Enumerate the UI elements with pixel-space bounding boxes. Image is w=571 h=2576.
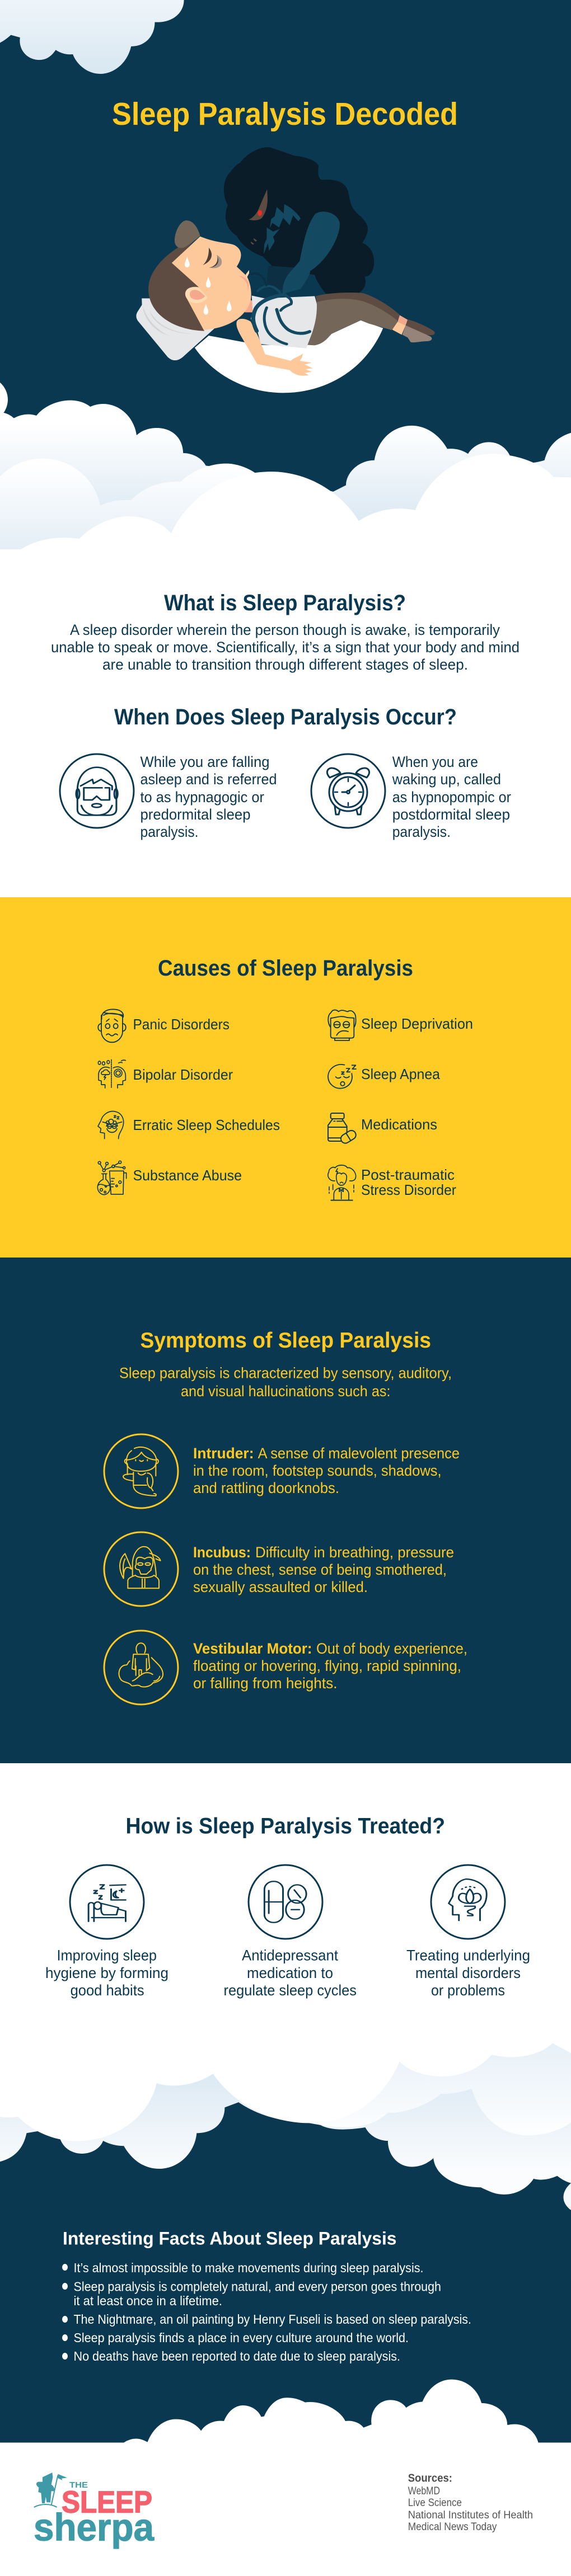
demon teeth	[264, 204, 301, 254]
icon: erratic sleep schedules	[98, 1112, 124, 1139]
clouds: hero bottom front layer	[18, 454, 571, 571]
clouds: footer	[124, 2380, 539, 2442]
list: interesting facts: Sleep paralysis is completely natural, and every person goes through	[74, 2279, 441, 2294]
text block: waking up: waking up, called	[392, 771, 501, 788]
text block: incubus: on the chest, sense of being smothered,	[193, 1561, 447, 1578]
text block: intruder: and rattling doorknobs.	[193, 1480, 339, 1496]
demon silhouette	[224, 147, 374, 294]
clouds: hero bottom middle layer	[0, 459, 350, 571]
text block: definition	[51, 621, 519, 673]
panel: treatment background	[0, 1763, 571, 2015]
text block: improving sleep hygiene: hygiene by forming	[45, 1965, 169, 1981]
text block: incubus: sexually assaulted or killed.	[193, 1579, 368, 1595]
text: post-traumatic stress disorder: Stress Disorder	[361, 1181, 456, 1198]
title: Sleep Paralysis Decoded	[112, 96, 458, 132]
text: bipolar disorder: Bipolar Disorder	[133, 1066, 233, 1083]
text block: intruder: A sense of malevolent presence	[258, 1445, 460, 1462]
logo word: the: THE	[69, 2480, 88, 2490]
icon: sleep deprivation	[328, 1010, 356, 1040]
text block: vestibular motor: floating or hovering, flying, rapid spinning,	[193, 1657, 461, 1674]
text block: definition: A sleep disorder wherein the person though is awake, is temporarily	[70, 621, 500, 638]
hair	[148, 237, 204, 331]
arm	[236, 319, 313, 376]
illustration: sleeper and shadow demon on moon	[136, 147, 435, 393]
demon nostrils	[251, 238, 257, 244]
near ankle	[392, 322, 406, 335]
text block: falling asleep: asleep and is referred	[140, 771, 277, 788]
heading: when does sleep paralysis occur: When Does Sleep Paralysis Occur?	[114, 705, 457, 729]
heading: symptoms of sleep paralysis: Symptoms of Sleep Paralysis	[140, 1329, 431, 1353]
text block: improving sleep hygiene	[45, 1947, 169, 1999]
demon pupil	[258, 210, 262, 216]
text: sleep apnea: Sleep Apnea	[361, 1066, 441, 1082]
text block: vestibular motor: Vestibular Motor:	[193, 1640, 312, 1657]
icon: intruder ghost in circle	[104, 1434, 178, 1508]
eyebrow	[203, 248, 212, 265]
text: panic disorders: Panic Disorders	[133, 1016, 230, 1033]
text: post-traumatic stress disorder	[361, 1166, 456, 1198]
list: interesting facts: it at least once in a lifetime.	[74, 2294, 222, 2308]
text block: waking up: postdormital sleep	[392, 806, 510, 823]
heading: causes of sleep paralysis: Causes of Sleep Paralysis	[158, 956, 413, 981]
icon: sleep mask face in circle	[60, 754, 134, 828]
icon: pills in circle	[249, 1865, 322, 1939]
neck	[245, 299, 258, 312]
text block: falling asleep: to as hypnagogic or	[140, 789, 264, 806]
text block: treating underlying: Treating underlying	[406, 1947, 530, 1964]
ear	[185, 287, 208, 303]
list: interesting facts: It’s almost impossible to make movements during sleep paralysis.	[74, 2261, 423, 2275]
clouds: hero bottom back layer	[0, 383, 571, 571]
text block: vestibular motor: or falling from heights.	[193, 1675, 337, 1692]
text block: antidepressant: regulate sleep cycles	[224, 1982, 357, 1999]
text block: definition: are unable to transition through different stages of sleep.	[102, 656, 468, 673]
logo: the sleep sherpa	[34, 2473, 155, 2549]
panel: facts navy background	[0, 2064, 571, 2443]
list: interesting facts: Sleep paralysis finds a place in every culture around the world.	[74, 2330, 409, 2345]
icon: panic disorders	[98, 1009, 126, 1042]
text block: treating underlying	[406, 1947, 530, 1999]
text block: vestibular motor: Out of body experience,	[316, 1640, 467, 1657]
text block: sources: Sources:	[408, 2473, 452, 2485]
icon: incubus reaper in circle	[104, 1532, 178, 1606]
text block: treating underlying: mental disorders	[415, 1965, 521, 1981]
hair tuft	[175, 220, 200, 248]
text block: antidepressant: medication to	[247, 1965, 333, 1981]
eyelid	[209, 255, 222, 268]
panel: symptoms background	[0, 1258, 571, 1763]
text block: incubus: Incubus:	[193, 1544, 251, 1561]
lip highlight	[246, 270, 249, 278]
text block: antidepressant: Antidepressant	[242, 1947, 338, 1964]
panel: causes background	[0, 897, 571, 1258]
list: interesting facts: The Nightmare, an oil painting by Henry Fuseli is based on sleep paralysis.	[74, 2312, 471, 2327]
text block: intruder: in the room, footstep sounds, shadows,	[193, 1462, 442, 1479]
heading: interesting facts: Interesting Facts About Sleep Paralysis	[63, 2229, 396, 2249]
icon: alarm clock in circle	[311, 754, 385, 828]
text block: falling asleep: predormital sleep	[140, 806, 251, 823]
text block: vestibular motor	[193, 1640, 467, 1692]
text block: treating underlying: or problems	[431, 1982, 505, 1999]
face	[172, 237, 251, 330]
text: erratic sleep schedules: Erratic Sleep Schedules	[133, 1117, 280, 1133]
heading: how is sleep paralysis treated: How is Sleep Paralysis Treated?	[125, 1814, 445, 1838]
near sock	[402, 326, 432, 342]
tears	[185, 256, 232, 314]
text block: definition: unable to speak or move. Scientifically, it’s a sign that your body and mind	[51, 639, 519, 656]
icon: vestibular motor floating figure in circle	[104, 1631, 178, 1704]
far ankle	[397, 315, 408, 326]
text block: intruder	[193, 1445, 460, 1496]
shirt	[251, 295, 318, 349]
text block: symptoms intro: Sleep paralysis is characterized by sensory, auditory,	[119, 1365, 452, 1382]
panel: hero background	[0, 0, 571, 559]
eyelash	[209, 255, 218, 267]
panel: footer background	[0, 2442, 571, 2576]
text block: incubus	[193, 1544, 454, 1595]
text block: waking up: When you are	[392, 754, 478, 770]
demon eye	[249, 189, 268, 220]
text: post-traumatic stress disorder: Post-traumatic	[361, 1166, 455, 1183]
near trouser leg	[308, 299, 397, 345]
clouds: hanging front layer	[0, 2019, 571, 2141]
clouds: hanging middle layer	[310, 2043, 571, 2135]
text block: falling asleep: paralysis.	[140, 823, 198, 840]
list: interesting facts	[62, 2261, 471, 2363]
text block: incubus: Difficulty in breathing, pressure	[255, 1544, 454, 1561]
clouds: hanging back layer	[0, 2019, 571, 2194]
logo word: sherpa: sherpa	[34, 2506, 155, 2549]
text block: antidepressant	[224, 1947, 357, 1999]
text block: intruder: Intruder:	[193, 1445, 254, 1462]
far sock	[406, 319, 435, 335]
icon: sleep hygiene bed in circle	[70, 1865, 144, 1939]
text block: sources: Medical News Today	[408, 2521, 497, 2533]
text block: symptoms intro	[119, 1365, 452, 1400]
inner ear	[190, 290, 205, 300]
icon: bipolar disorder	[98, 1059, 125, 1088]
text block: symptoms intro: and visual hallucinations such as:	[181, 1383, 391, 1400]
demon lower arm shade	[267, 266, 296, 290]
cloud: top left	[0, 0, 184, 74]
pillow creases	[143, 306, 195, 336]
text block: sources: Live Science	[408, 2497, 462, 2509]
cloud: corner lobe	[563, 2183, 571, 2210]
heading: what is sleep paralysis: What is Sleep Paralysis?	[164, 591, 406, 615]
text block: sources	[408, 2473, 533, 2533]
text block: waking up: as hypnopompic or	[392, 789, 511, 806]
icon: substance abuse	[97, 1161, 127, 1195]
demon arm	[283, 211, 340, 294]
text block: waking up	[392, 754, 511, 840]
text block: waking up: paralysis.	[392, 823, 451, 840]
text block: falling asleep: While you are falling	[140, 754, 270, 770]
text block: sources: National Institutes of Health	[408, 2509, 533, 2521]
text block: falling asleep	[140, 754, 277, 840]
demon tentacle fingers	[251, 274, 310, 344]
pillow	[136, 298, 215, 360]
icon: post-traumatic stress	[328, 1165, 356, 1200]
list: interesting facts: No deaths have been reported to date due to sleep paralysis.	[74, 2349, 400, 2363]
text block: improving sleep hygiene: good habits	[71, 1982, 144, 1999]
icon: sleep apnea	[328, 1065, 356, 1089]
logo figure	[34, 2473, 67, 2507]
text block: improving sleep hygiene: Improving sleep	[57, 1947, 157, 1964]
text: medications: Medications	[361, 1116, 437, 1133]
text: sleep deprivation: Sleep Deprivation	[361, 1015, 473, 1032]
lips	[238, 276, 249, 291]
logo word: sleep: SLEEP	[62, 2485, 152, 2520]
moon	[195, 321, 383, 393]
panel: what is / when does section background	[0, 549, 571, 897]
text block: sources: WebMD	[408, 2485, 440, 2497]
far trouser leg	[316, 293, 400, 321]
icon: medications	[328, 1113, 358, 1145]
icon: mind lotus in circle	[431, 1865, 505, 1939]
text: substance abuse: Substance Abuse	[133, 1167, 242, 1184]
